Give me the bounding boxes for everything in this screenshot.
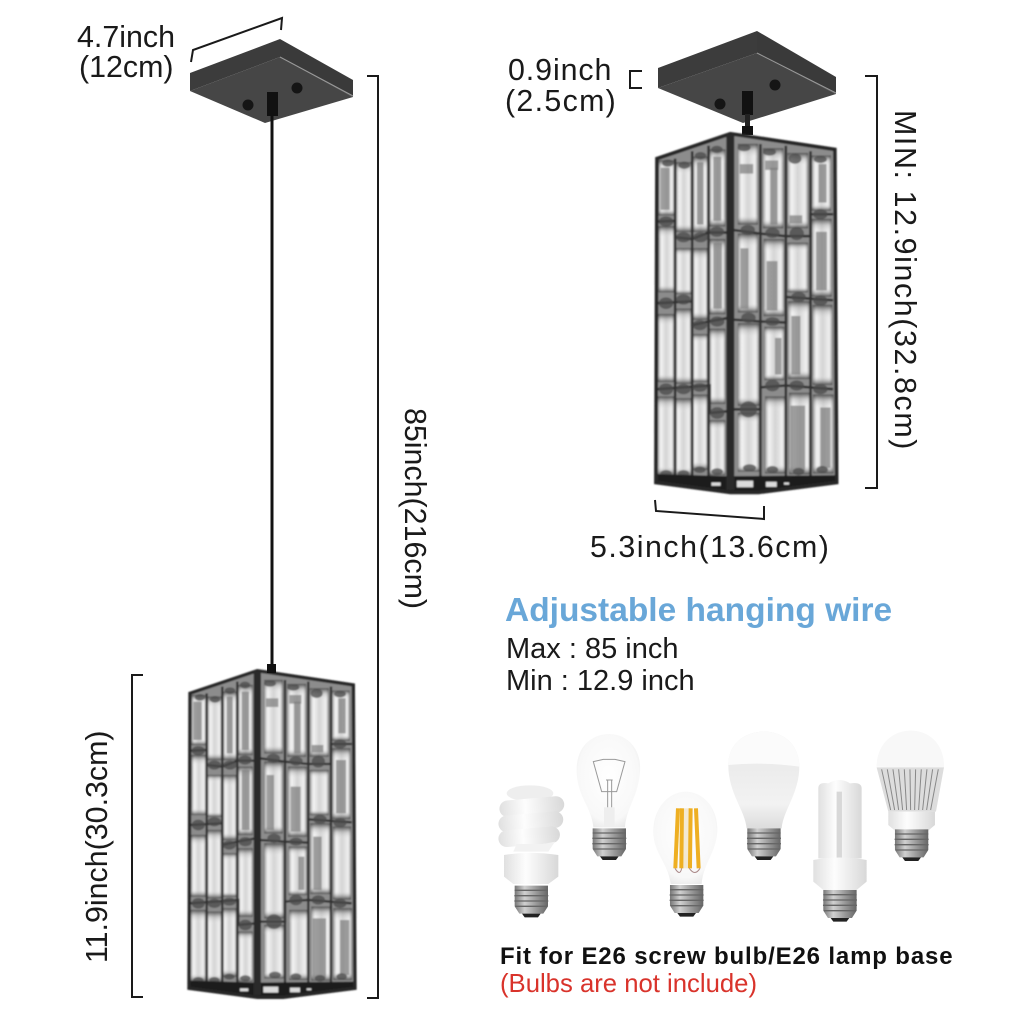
dimension: total height bracket (367, 76, 378, 998)
label: canopy depth: 0.9inch (508, 53, 612, 87)
bulbs group (498, 731, 944, 922)
canopy: right pendant (658, 31, 836, 135)
hanging wire (270, 114, 274, 672)
bulb: tube CFL (813, 780, 867, 922)
text: wire max and min: Max : 85 inch (506, 633, 678, 665)
bulb: clear incandescent (577, 734, 640, 860)
label: canopy depth: (2.5cm) (505, 84, 617, 118)
label: canopy width: 4.7inch (77, 20, 175, 54)
lantern: left pendant (189, 671, 355, 997)
dimension: canopy width bracket (191, 18, 282, 62)
text: bulb compatibility: Fit for E26 screw bulb/E26 lamp base (500, 943, 953, 970)
dimension: lantern height bracket (132, 675, 143, 997)
label: minimum height: MIN: 12.9inch(32.8cm) (888, 110, 922, 451)
label: lantern height: 11.9inch(30.3cm) (80, 730, 114, 963)
heading: adjustable hanging wire: Adjustable hanging wire (505, 592, 892, 629)
label: canopy depth (505, 53, 617, 118)
bulb: LED globe (728, 732, 799, 860)
dimension: minimum height bracket (865, 76, 877, 488)
bulb: amber filament (653, 792, 717, 917)
dimension: canopy depth bracket (630, 71, 642, 88)
lantern: right pendant (656, 134, 837, 492)
bulb: spiral CFL (498, 785, 565, 917)
text: bulbs not included note: (Bulbs are not include) (500, 970, 757, 998)
bulb: LED with fins (877, 731, 944, 861)
label: canopy width (77, 20, 175, 84)
label: total height: 85inch(216cm) (398, 408, 432, 609)
text: wire max and min (506, 633, 695, 697)
wire nut (267, 664, 276, 673)
label: canopy width: (12cm) (79, 50, 174, 84)
text: wire max and min: Min : 12.9 inch (506, 665, 695, 697)
canopy: left pendant (190, 39, 353, 123)
dimension: lantern width bracket (655, 500, 764, 519)
label: lantern width: 5.3inch(13.6cm) (590, 530, 830, 564)
